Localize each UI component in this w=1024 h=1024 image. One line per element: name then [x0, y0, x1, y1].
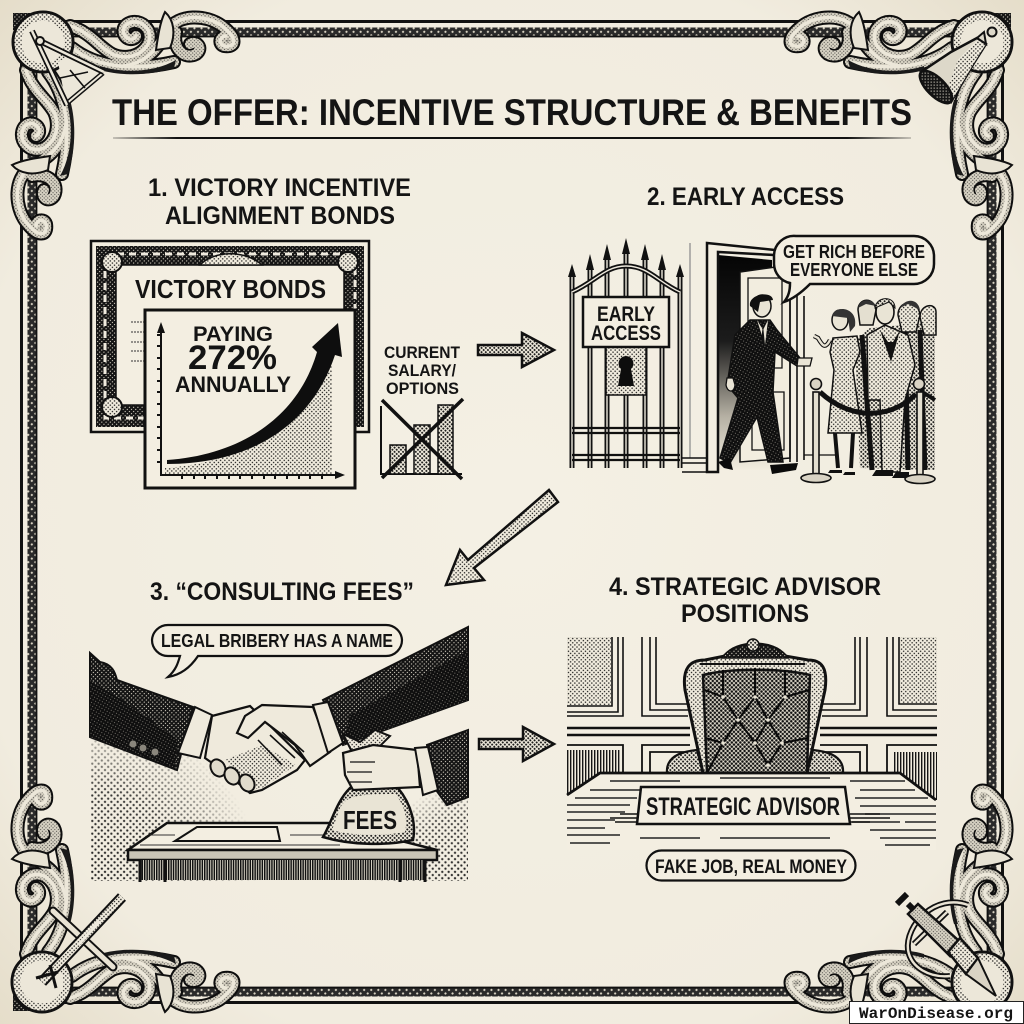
title: THE OFFER: INCENTIVE STRUCTURE & BENEFITS [112, 92, 912, 133]
handshake [205, 705, 330, 794]
chart card: paying 272% annually: ANNUALLY [175, 372, 291, 397]
heading 4: 4. STRATEGIC ADVISOR [609, 573, 881, 601]
hand gripping the bag [343, 745, 438, 795]
heading 4: POSITIONS [681, 600, 809, 628]
velvet rope stanchions [801, 378, 935, 484]
crossed-out salary chart [381, 343, 463, 479]
chart card: paying 272% annually [145, 310, 355, 488]
chair arms [667, 750, 703, 773]
speech bubble: get rich before everyone else: GET RICH BEFORE [783, 242, 925, 262]
heading 1 [148, 174, 411, 230]
heading 1: ALIGNMENT BONDS [165, 202, 395, 230]
corner ornament: bottom right syringe [790, 790, 1012, 1012]
speech bubble: legal bribery has a name [152, 625, 402, 677]
man walking through the door [718, 294, 812, 474]
third sleeve [427, 730, 468, 805]
speech bubble: get rich before everyone else [774, 236, 934, 302]
halftone backdrop [91, 738, 468, 881]
iron gate: ACCESS [591, 322, 661, 345]
dotted area under curve [165, 358, 332, 474]
desk [128, 823, 437, 882]
heading 1: 1. VICTORY INCENTIVE [148, 174, 411, 202]
gate sign [583, 297, 669, 347]
money bag body labelled fees [323, 788, 414, 844]
panel: 4 strategic advisor positions [567, 573, 937, 880]
corner ornament: top right bell [790, 12, 1012, 234]
iron gate [568, 238, 684, 468]
keyhole [618, 356, 634, 386]
left cuff [178, 707, 212, 758]
arrow: step 3 to step 4 [479, 727, 554, 761]
watermark: WarOnDisease.org [859, 1005, 1013, 1023]
crossed-out salary chart: SALARY/ [388, 361, 456, 380]
title rule [113, 137, 911, 139]
crossed-out salary chart: CURRENT [384, 343, 461, 362]
corner ornament: top left compass [12, 12, 234, 234]
chair upholstery [703, 670, 810, 773]
heading 2: 2. EARLY ACCESS [647, 183, 844, 211]
growth arrow [167, 323, 342, 464]
crowd behind rope [855, 300, 936, 470]
iron gate: EARLY [597, 303, 655, 326]
nameplate: strategic advisor [637, 787, 850, 824]
right cuff [313, 702, 343, 753]
tufted chair [667, 639, 843, 773]
man in suit at right of crowd [867, 299, 915, 478]
panel: 1 victory incentive alignment bonds [91, 174, 463, 488]
chair frame and crest [684, 644, 826, 773]
panelled wall [567, 637, 937, 800]
chart card: paying 272% annually: PAYING [193, 323, 273, 346]
heading 3: 3. “CONSULTING FEES” [150, 578, 414, 606]
heading 4 [609, 573, 881, 628]
money bag body labelled fees: FEES [343, 805, 397, 835]
arrow: step 1 to step 2 [478, 333, 554, 367]
left sleeve [90, 653, 193, 770]
caption pill: fake job, real money: FAKE JOB, REAL MONEY [655, 857, 847, 878]
right sleeve [323, 627, 468, 745]
nameplate: strategic advisor: STRATEGIC ADVISOR [646, 793, 840, 821]
bond certificate: VICTORY BONDS [135, 274, 326, 304]
panel: 2 early access [568, 183, 936, 484]
speech bubble: get rich before everyone else: EVERYONE ELSE [790, 260, 918, 280]
crossed-out salary chart: OPTIONS [386, 379, 459, 398]
speech bubble: legal bribery has a name: LEGAL BRIBERY HAS A NAME [161, 631, 393, 651]
bond certificate [91, 241, 369, 432]
panel: 3 consulting fees [90, 578, 468, 882]
woman in dress [814, 309, 862, 475]
arrow: step 2 to step 3 [446, 490, 558, 585]
doorway [682, 243, 836, 472]
corner ornament: bottom left crossed tools [12, 790, 234, 1012]
gate lock plate [606, 347, 646, 395]
chart card: paying 272% annually: 272% [188, 339, 277, 377]
caption pill: fake job, real money [646, 850, 856, 880]
money bag neck [343, 730, 390, 752]
desk [567, 773, 936, 850]
